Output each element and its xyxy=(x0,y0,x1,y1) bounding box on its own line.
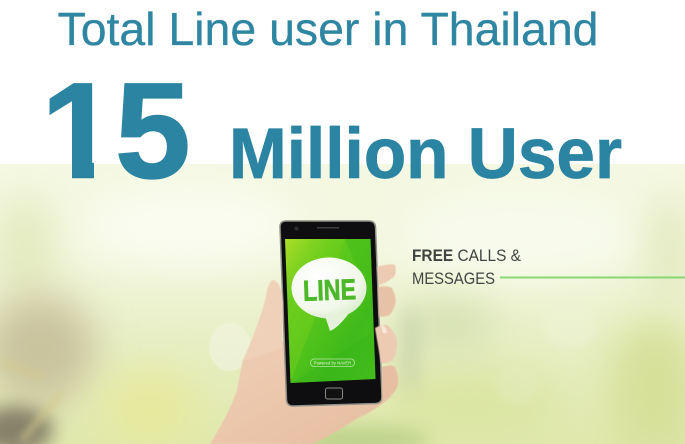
icon: phone screen xyxy=(285,239,376,383)
illustration: hand holding phone xyxy=(210,221,398,444)
label: powered by naver: Powered by NAVER xyxy=(314,360,351,366)
icon: fingers xyxy=(375,264,398,400)
big number: 15: 5 xyxy=(115,54,191,206)
callout: free calls and messages xyxy=(412,246,685,288)
icon: LINE speech bubble: LINE xyxy=(302,274,357,308)
callout: free calls and messages: MESSAGES xyxy=(412,269,495,288)
big number: 15: 1 xyxy=(41,54,117,206)
big number: 15 xyxy=(50,83,188,180)
icon: phone body xyxy=(280,221,382,406)
callout line xyxy=(500,276,685,278)
callout: free calls and messages: FREE CALLS & xyxy=(412,246,522,265)
icon: LINE speech bubble xyxy=(292,258,366,331)
icon: speaker and camera xyxy=(294,226,339,230)
icon: hand palm xyxy=(210,340,392,444)
panel: blurred nature background xyxy=(0,164,685,444)
icon: thumb xyxy=(243,280,283,360)
icon: phone home button xyxy=(326,388,342,399)
title: Total Line user in Thailand xyxy=(58,3,598,55)
label: powered by naver xyxy=(310,359,354,366)
heading: Million User: Million User xyxy=(229,115,622,194)
